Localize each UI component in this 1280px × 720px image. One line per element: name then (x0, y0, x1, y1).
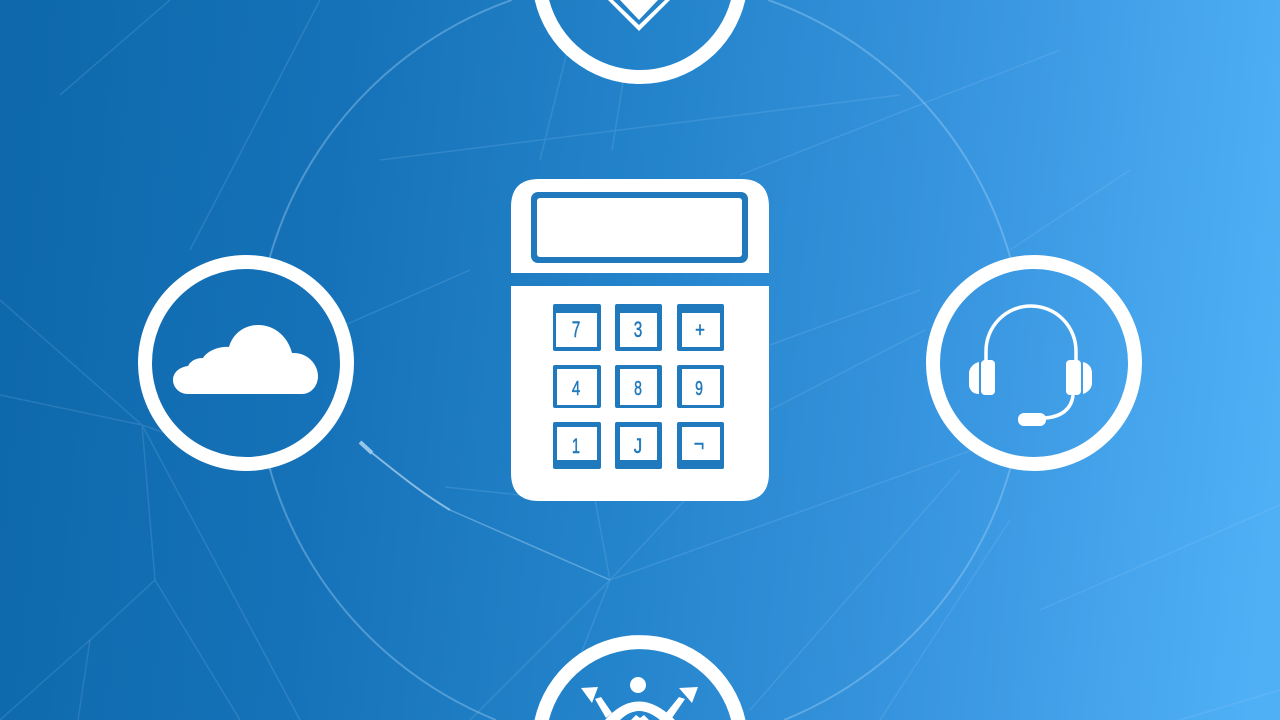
key row 3: ¬ (694, 433, 704, 456)
calculator display (531, 192, 748, 263)
key row 2: 8 (634, 376, 642, 400)
key row 1: 3 (634, 318, 642, 343)
key row 3: 1 (572, 434, 580, 458)
icon: cloud in left circle (145, 262, 347, 464)
key row 2 (553, 365, 724, 408)
key row 1 (553, 304, 724, 351)
icon: shield in top circle (535, 0, 745, 84)
bright connector trace (360, 442, 610, 580)
calculator body (511, 179, 769, 501)
icon: network gear in bottom circle (534, 635, 746, 720)
key row 2: 9 (695, 376, 703, 400)
icon: headset in right circle (933, 262, 1135, 464)
key row 1: 7 (572, 318, 580, 343)
large orbit ring (255, 0, 1025, 720)
key row 3: J (634, 435, 642, 459)
key row 1: + (695, 319, 705, 343)
key row 3 (553, 422, 724, 469)
calculator (511, 179, 769, 501)
key row 2: 4 (572, 377, 580, 400)
